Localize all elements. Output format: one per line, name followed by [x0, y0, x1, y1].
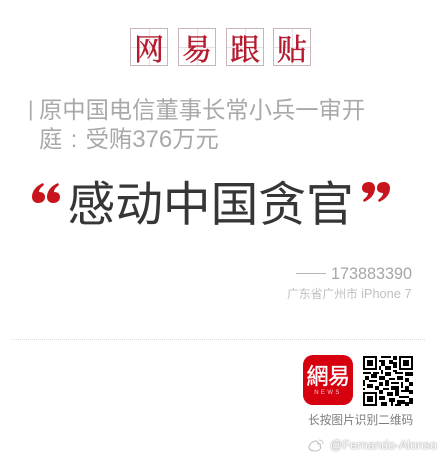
comment location and device: 广东省广州市 iPhone 7 [287, 286, 412, 301]
box: 跟: 跟 [230, 25, 260, 69]
watermark: @Fernando-Alonso [330, 438, 437, 452]
news subtitle text block: 庭 受贿376万元 [39, 126, 219, 153]
box: 贴: 贴 [277, 25, 307, 69]
box: 网: 网 [134, 25, 164, 69]
news subtitle text block: | [28, 98, 33, 121]
QR code [363, 356, 413, 406]
icon: left red quotation mark [32, 183, 60, 203]
icon: NetEase News app: 網易 [306, 359, 350, 391]
icon: NetEase News app [303, 355, 353, 405]
news subtitle text block [28, 97, 365, 153]
main title: 感动中国贪官 [68, 179, 354, 232]
icon: NetEase News app: NEWS [314, 390, 342, 396]
QR caption: 长按图片识别二维码 [308, 414, 413, 427]
comment author name: 173883390 [331, 265, 412, 283]
icon: right red quotation mark [362, 182, 390, 202]
icon: weibo logo [308, 440, 324, 452]
header: 网易跟贴 stamp boxes [130, 25, 311, 69]
news subtitle text block: : [71, 126, 77, 152]
box: 易: 易 [182, 25, 212, 69]
news subtitle text block: 原中国电信董事长常小兵一审开 [39, 97, 365, 123]
